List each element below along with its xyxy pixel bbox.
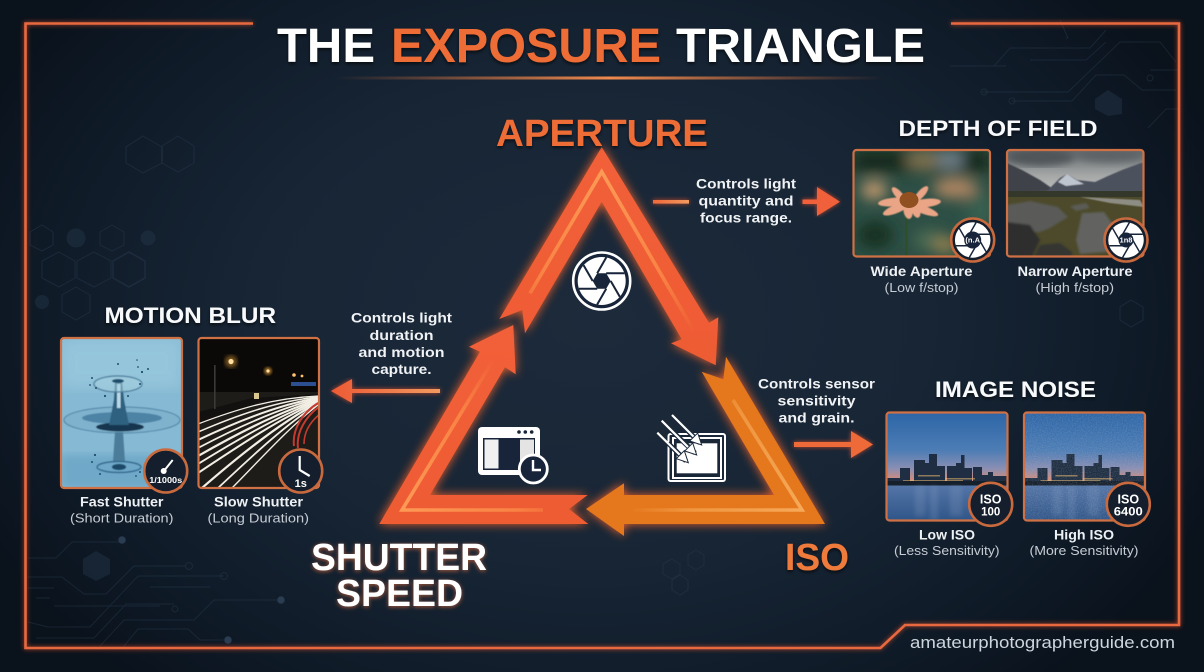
panel: depth of field [853,116,1148,295]
caption: iso: Controls sensor [758,376,876,392]
label: fast shutter: (Short Duration) [70,510,174,526]
footer website: amateurphotographerguide.com [910,633,1175,652]
label: shutter speed: SPEED [336,573,463,615]
label: wide aperture: Wide Aperture [870,264,973,279]
badge: slow shutter [279,450,322,492]
caption: iso: and grain. [778,410,854,426]
segment: shutter speed arm [379,325,588,524]
label: shutter speed [311,537,487,615]
badge: iso 100: 100 [981,506,1000,518]
label: high iso [1030,528,1138,558]
badge: iso 6400 [1107,483,1150,526]
photo frame [854,150,990,256]
arrow: aperture to depth of field [653,187,840,216]
label: low iso: (Less Sensitivity) [894,543,1000,558]
label: narrow aperture: (High f/stop) [1036,280,1114,295]
label: low iso [894,528,1000,558]
title underline [335,76,885,80]
caption: aperture: Controls light [696,176,796,192]
photo: city low iso [886,412,1008,521]
label: wide aperture [870,264,973,295]
label: slow shutter [208,494,309,526]
label: aperture: APERTURE [496,113,708,155]
badge: fast shutter [144,450,187,492]
photo: city high iso [1024,412,1145,521]
photo frame [198,338,319,488]
badge: iso 6400: 6400 [1114,506,1143,518]
label: iso: ISO [785,537,849,579]
caption: iso [758,376,876,426]
panel: motion blur [61,303,322,526]
photo: mountains narrow aperture [1005,148,1145,257]
caption: iso: sensitivity [778,392,856,408]
heading: image noise: IMAGE NOISE [935,377,1096,402]
label: high iso: (More Sensitivity) [1030,543,1138,558]
caption: shutter speed: Controls light [351,310,452,326]
arrow: shutter speed to motion blur [331,379,440,403]
caption: shutter speed [351,310,452,377]
caption: aperture: quantity and [698,192,794,208]
badge: narrow aperture [1104,218,1148,262]
segment: iso arm [586,357,825,536]
icon: aperture [573,252,630,310]
label: slow shutter: Slow Shutter [214,494,304,510]
caption: shutter speed: duration [370,327,434,343]
badge: fast shutter: 1/1000s [149,475,182,485]
photo: long exposure traffic [198,338,320,488]
label: wide aperture: (Low f/stop) [884,280,958,295]
photo frame [61,338,182,488]
title [277,20,925,73]
arrow: iso to image noise [794,431,873,458]
photo: flower wide aperture [853,150,994,258]
title: EXPOSURE [391,20,661,73]
photo frame [1024,412,1145,520]
label: high iso: High ISO [1054,528,1114,542]
label: fast shutter: Fast Shutter [80,494,164,510]
badge: iso 100: ISO [980,492,1002,506]
photo frame [886,412,1008,520]
label: narrow aperture: Narrow Aperture [1018,264,1133,279]
photo frame [1007,150,1144,256]
icon: sensor with light rays [657,415,725,481]
photo: water droplet [61,338,182,488]
label: fast shutter [70,494,174,526]
badge: iso 100 [969,483,1012,526]
badge: slow shutter: 1s [295,478,307,490]
title: TRIANGLE [676,20,925,73]
label: low iso: Low ISO [919,528,975,542]
label: slow shutter: (Long Duration) [208,510,309,526]
background dots and filled hexagons [35,90,1122,581]
badge: narrow aperture: 1n8 [1120,236,1132,245]
exposure triangle [379,147,825,536]
badge: iso 6400: ISO [1118,492,1139,506]
caption: shutter speed: and motion [358,344,444,360]
panel: image noise [886,377,1150,558]
badge: wide aperture [951,218,994,262]
caption: shutter speed: capture. [372,361,432,377]
label: narrow aperture [1018,264,1133,295]
caption: aperture [696,176,796,226]
segment: aperture arm [499,147,718,365]
caption: aperture: focus range. [700,210,792,226]
heading: depth of field: DEPTH OF FIELD [898,116,1098,141]
label: shutter speed: SHUTTER [311,537,487,579]
title: THE [277,20,375,73]
icon: shutter window with clock [478,427,547,483]
heading: motion blur: MOTION BLUR [104,303,276,328]
badge: wide aperture: (n.A [965,236,981,245]
